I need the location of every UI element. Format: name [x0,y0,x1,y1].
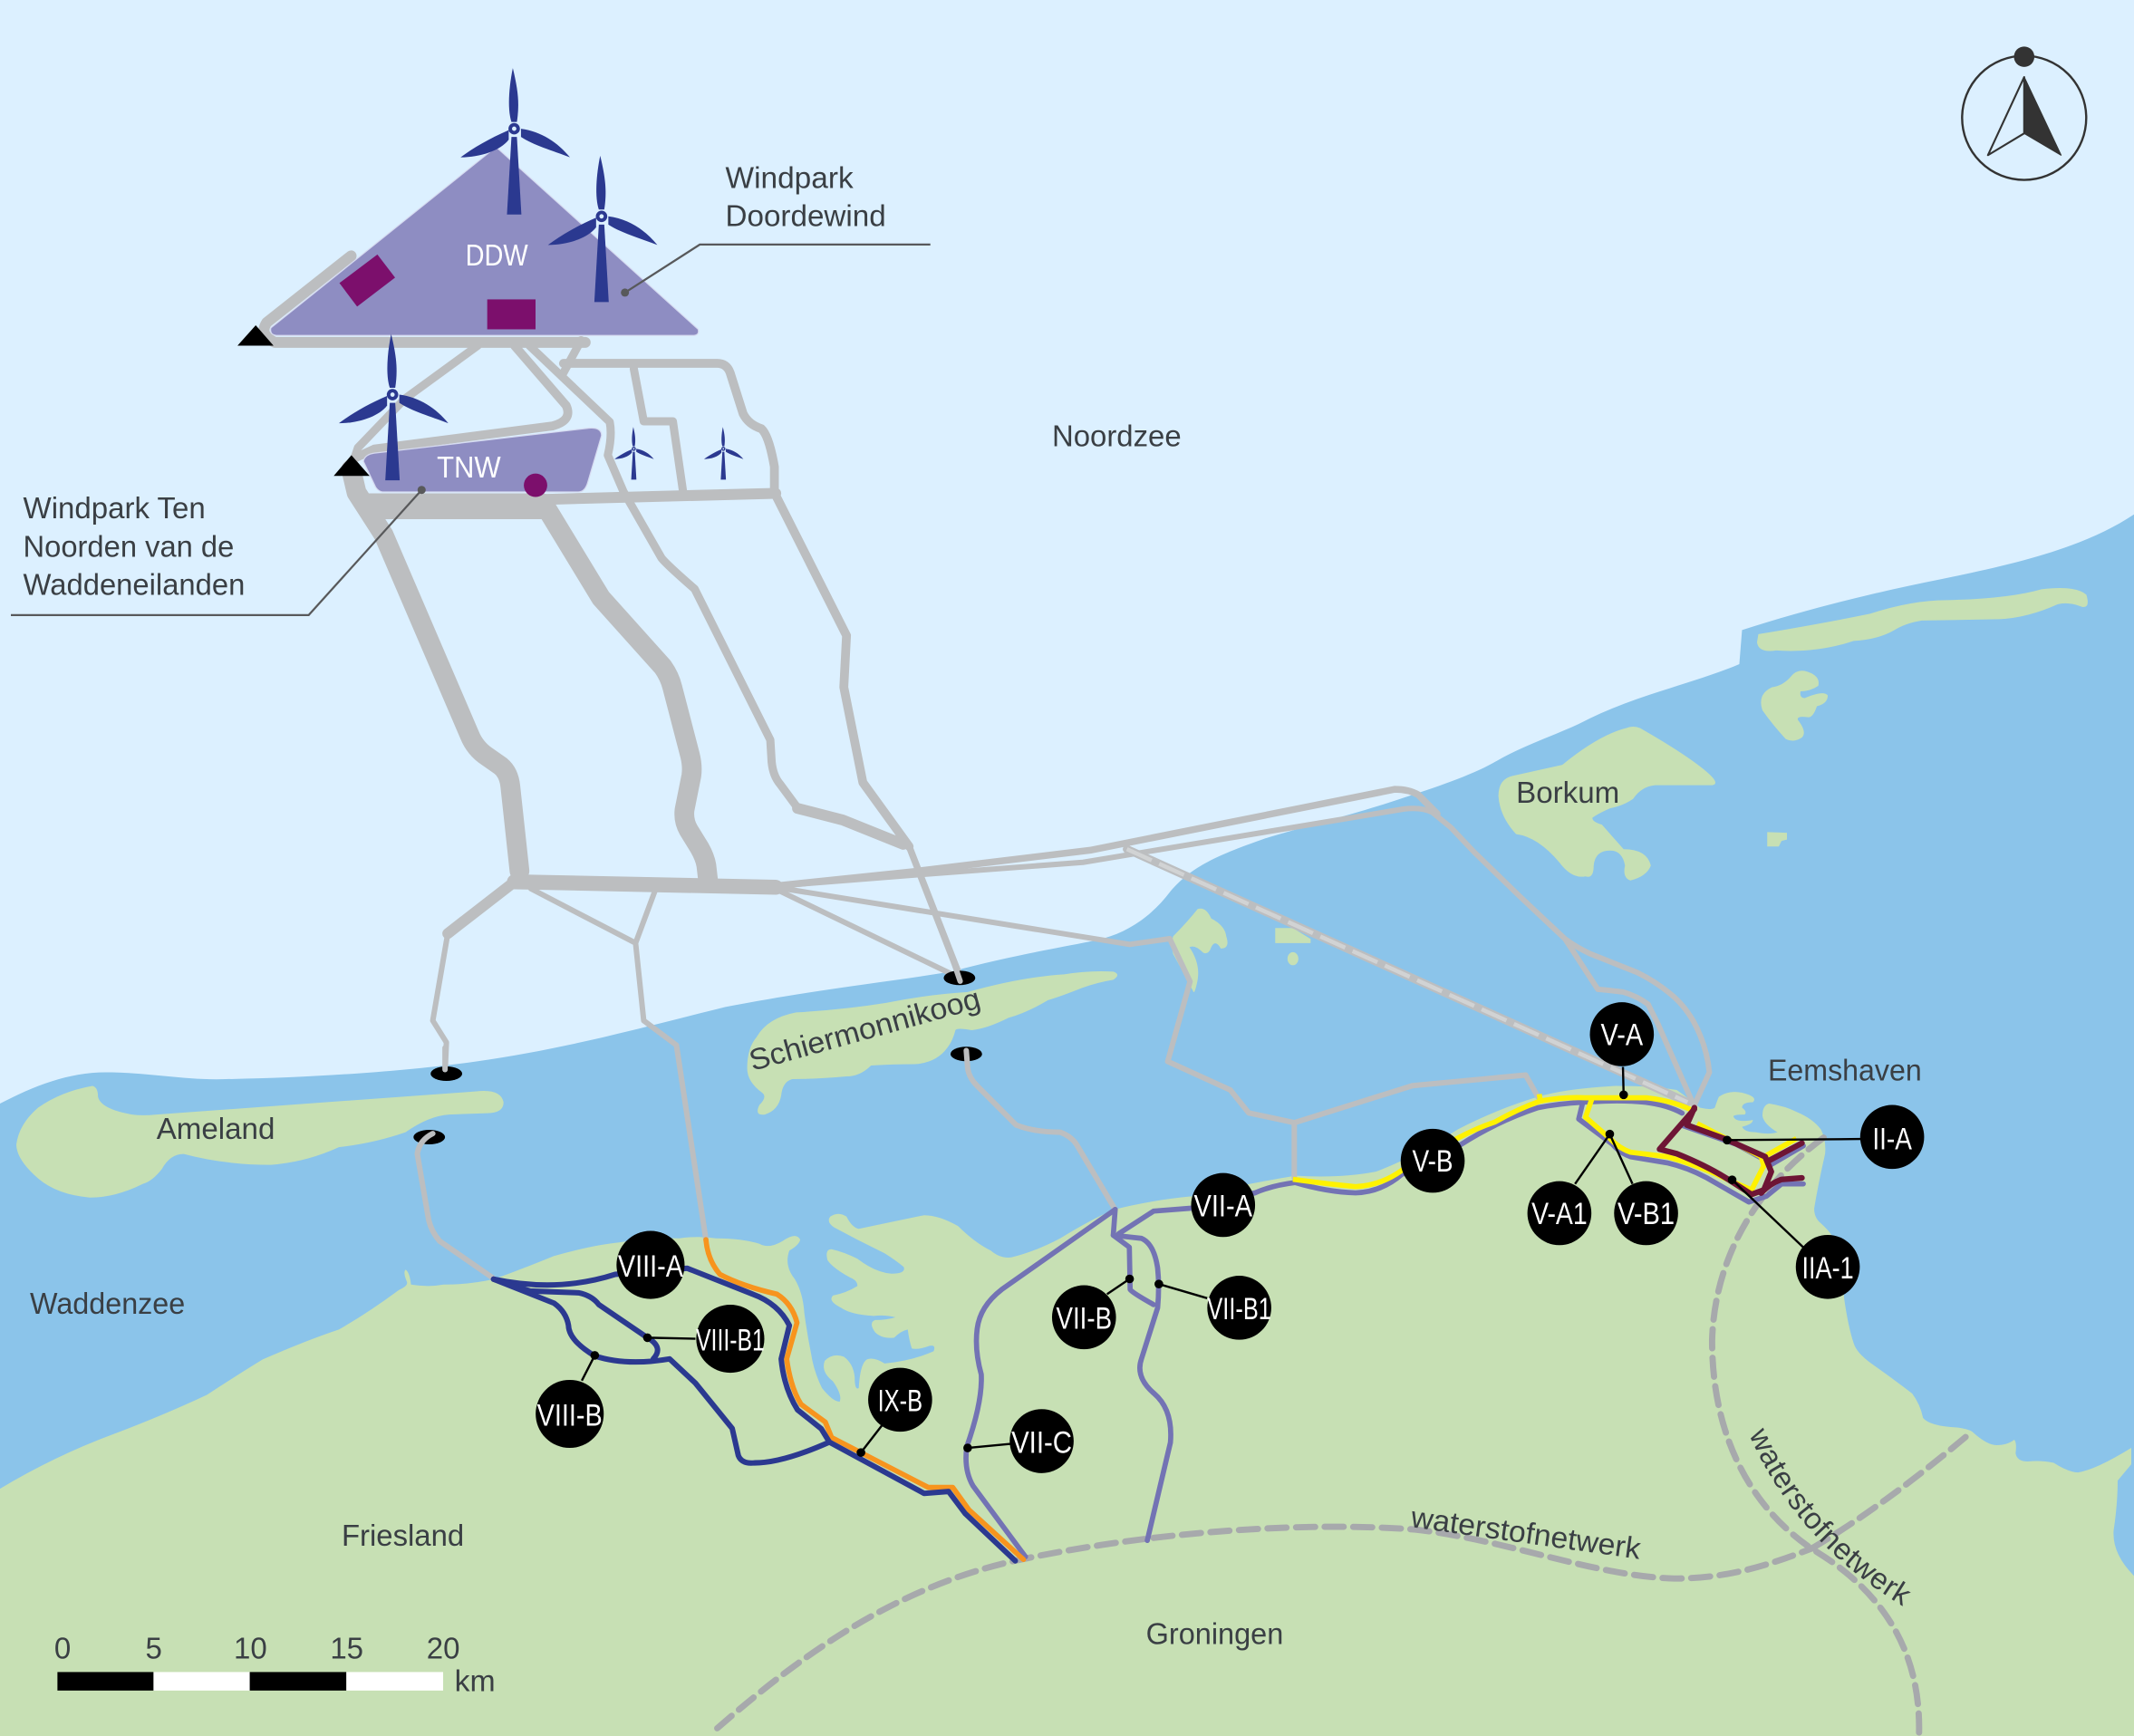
place label: Groningen: Groningen [1146,1617,1283,1651]
leader lines and dots for route badges [582,1067,1860,1457]
label: waterstofnetwerk east-west: waterstofnetwerk [1408,1500,1643,1567]
island: Ameland [16,1086,504,1198]
badge: VII-A [1191,1173,1255,1237]
badge: VIII-B1 [696,1305,765,1373]
scale bar: 20 [427,1632,460,1665]
badge: VII-B1 [1207,1276,1271,1340]
badge: VIII-B [536,1380,604,1448]
wind park area: Doordewind DDW [271,147,699,335]
badge: II-A [1860,1105,1924,1169]
wind park area: Ten Noorden van de Waddeneilanden TNW [363,428,602,492]
badge: IIA-1: IIA-1 [1802,1251,1854,1286]
island: Rottumeroog [1172,909,1228,992]
reference triangle west of TNW [333,455,370,476]
platform marker: DDW rotated rectangle [340,255,395,306]
icon: small wind turbine 1 [614,427,654,479]
reference triangle west of DDW [237,325,274,345]
scale bar [54,1632,496,1698]
badge: V-A1 [1528,1181,1591,1245]
badge: VIII-A: VIII-A [618,1249,683,1284]
icon: small wind turbine 2 [704,427,743,479]
icon: wind turbine 1 [460,68,570,215]
callout: Windpark Ten Noorden van de Waddeneilanden: Noorden van de [24,530,234,564]
icon: north arrow [1962,46,2086,180]
route: dark blue VIII [494,1268,1015,1561]
island: Borkum [1499,727,1715,881]
island: Schiermonnikoog [748,971,1117,1114]
badge: VII-B [1052,1286,1116,1349]
badge: IIA-1 [1796,1235,1859,1299]
scale bar: 10 [234,1632,267,1665]
place label: Noordzee: Noordzee [1052,420,1182,454]
Wadden Sea water [0,515,2134,1736]
island: small block [1767,832,1787,846]
callout: Windpark Ten Noorden van de Waddeneilanden: Waddeneilanden [24,568,245,602]
badge: V-A: V-A [1601,1017,1643,1052]
callout: Windpark Ten Noorden van de Waddeneilanden: Windpark Ten [24,492,206,526]
place label: Schiermonnikoog: Schiermonnikoog [746,982,984,1078]
badge: VII-C [1009,1409,1074,1473]
callout: Windpark Ten Noorden van de Waddeneilanden [11,486,426,615]
landfall markers [413,970,982,1144]
double cable lane, lighter dashes [1127,849,1687,1103]
platform marker: DDW rectangle [488,299,536,329]
scale bar: 15 [330,1632,363,1665]
place label: Ameland: Ameland [157,1113,275,1146]
badge: V-B [1401,1129,1464,1192]
platform marker: TNW circle [524,474,547,497]
route: maroon II-A [1659,1108,1802,1194]
hydrogen network dashed lines [718,1138,1972,1736]
island: Rottumerplaat [1275,928,1310,965]
badge: V-A1: V-A1 [1531,1197,1588,1231]
place label: Eemshaven: Eemshaven [1768,1055,1922,1088]
badge: VII-B: VII-B [1056,1302,1112,1336]
icon: wind turbine 3 [339,334,449,480]
route: orange IX-B [706,1239,1023,1559]
grey cable corridors [264,256,1709,1239]
badge: VII-C: VII-C [1011,1425,1072,1460]
place label: Friesland: Friesland [342,1519,464,1553]
badge: VII-B1: VII-B1 [1207,1292,1271,1326]
badge: V-B: V-B [1413,1144,1453,1179]
place label: Waddenzee: Waddenzee [30,1288,185,1321]
scale bar: 5 [146,1632,162,1665]
TNW label: TNW [437,451,501,485]
island: Lutje Hörn [1761,670,1828,740]
icon: wind turbine 2 [548,156,657,302]
grey cables from landfall markers to mainland [417,955,1115,1278]
route: yellow V [1293,1095,1797,1190]
callout: Windpark Doordewind [621,161,931,296]
badge: II-A: II-A [1872,1122,1912,1156]
callout: Windpark Doordewind: Windpark [726,161,854,195]
scale bar: 0 [54,1632,71,1665]
badge: IX-B [868,1368,932,1432]
route: purple VII and V [966,1101,1803,1557]
badge: V-B1: V-B1 [1617,1197,1675,1231]
scale bar: km [455,1664,496,1698]
badge: V-B1 [1614,1181,1678,1245]
badge: VIII-B: VIII-B [537,1398,603,1432]
badge: IX-B: IX-B [878,1384,922,1418]
badge: V-A [1590,1002,1654,1066]
badge: VIII-B1: VIII-B1 [696,1323,765,1357]
DDW label: DDW [466,239,528,273]
label: waterstofnetwerk north-south: waterstofnetwerk [1751,1428,1911,1606]
island: Memmert strip [1757,588,2088,651]
place label: Borkum: Borkum [1516,776,1619,810]
badge: VII-A: VII-A [1193,1190,1252,1224]
mainland: Friesland and Groningen [0,1086,2134,1736]
badge: VIII-A [616,1230,684,1299]
callout: Windpark Doordewind: Doordewind [726,199,886,233]
